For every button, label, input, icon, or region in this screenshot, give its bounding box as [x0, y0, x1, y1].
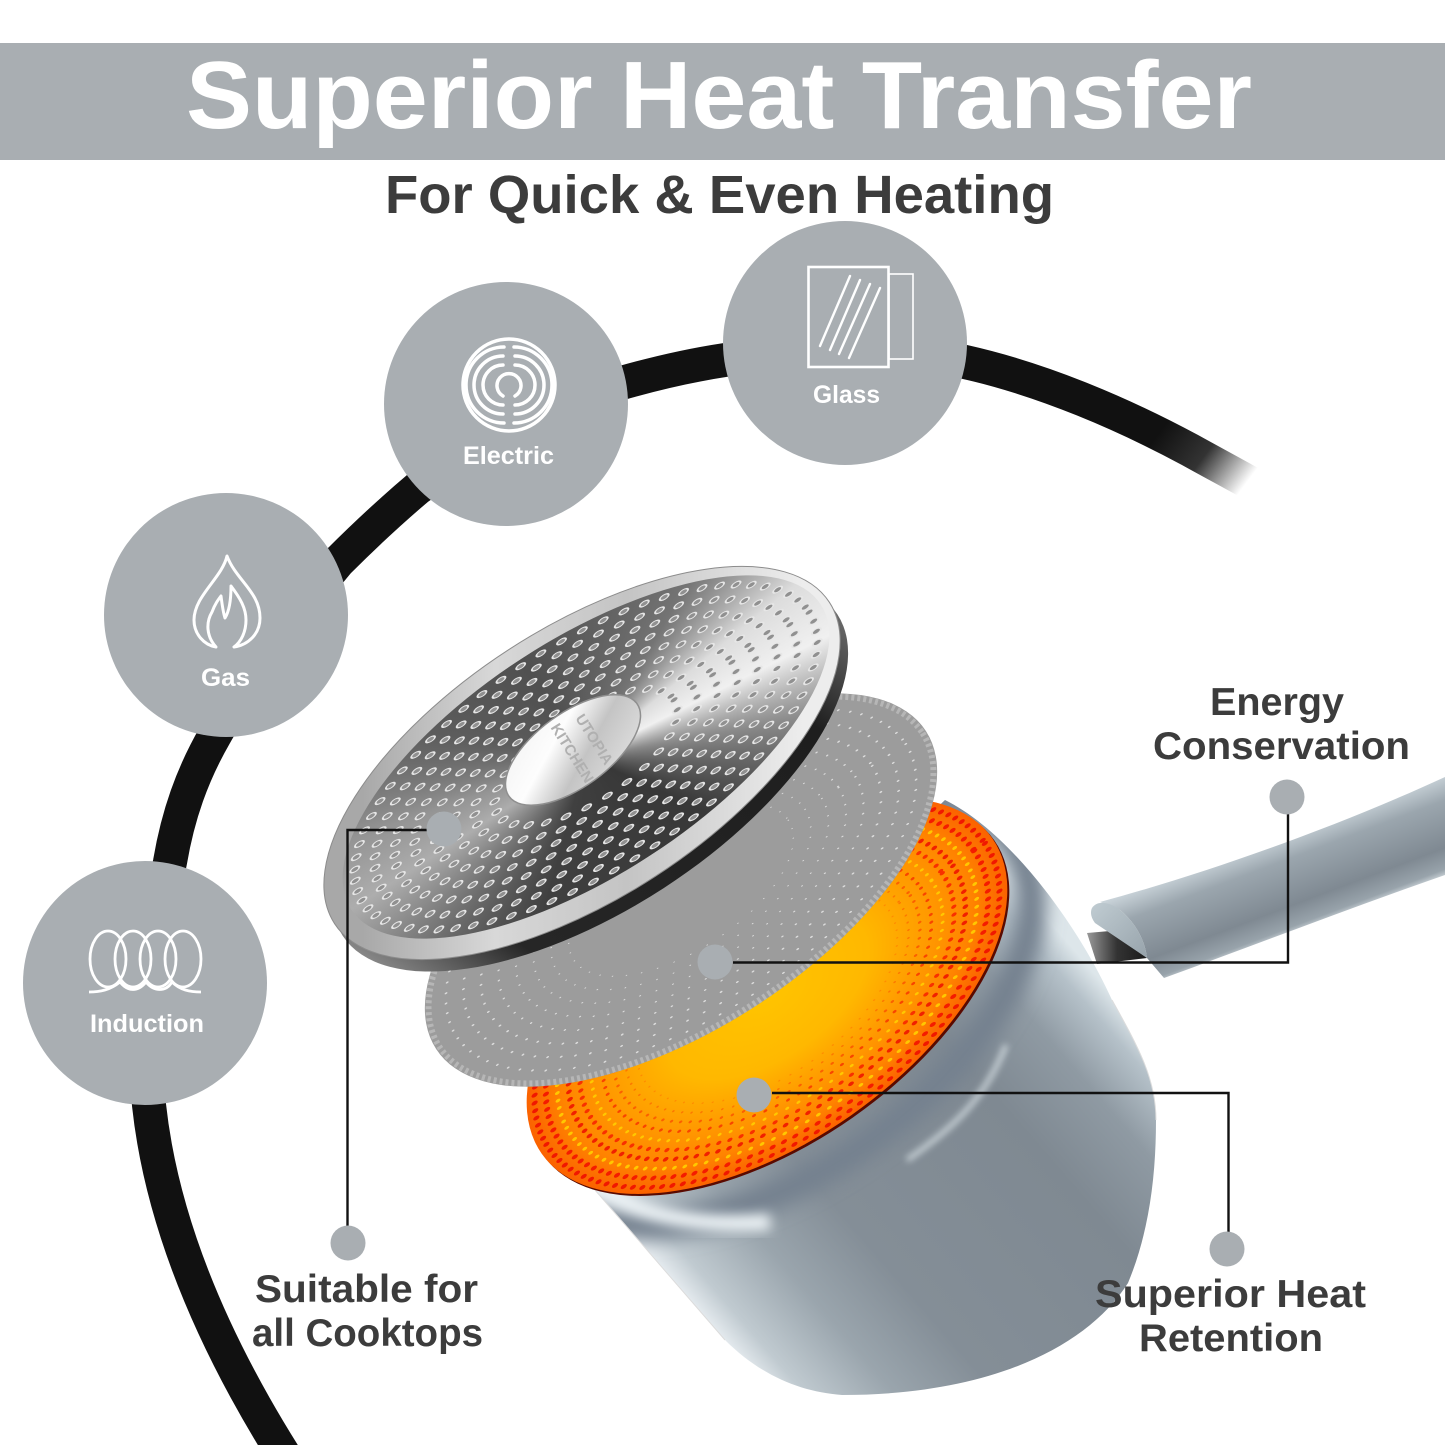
pan handle	[1087, 777, 1445, 978]
cooktop badge: induction	[23, 861, 267, 1105]
label: gas: Gas	[201, 664, 250, 692]
cooktop badge: electric	[384, 282, 628, 526]
title banner: Superior Heat Transfer	[186, 42, 1252, 149]
disc rim	[261, 489, 903, 1037]
callout: superior heat retention: Superior Heat	[1095, 1273, 1366, 1316]
disc textured face	[287, 506, 885, 1008]
disc centre hub with brand	[487, 674, 659, 826]
callout: energy conservation: Energy	[1210, 681, 1344, 724]
heated orange layer	[458, 719, 1078, 1275]
disc dark side band	[269, 501, 911, 1049]
handle end cap	[1091, 903, 1147, 958]
disc centre hub with brand: KITCHEN	[547, 721, 597, 786]
rim highlight right	[907, 1045, 1006, 1160]
callout: suitable for all cooktops: all Cooktops	[252, 1312, 483, 1355]
cooktop badge: gas	[104, 493, 348, 737]
thin pan outline	[569, 1000, 1156, 1340]
callout: suitable for all cooktops: Suitable for	[255, 1268, 478, 1311]
icon: glass panel	[808, 267, 913, 367]
callout: superior heat retention: Retention	[1139, 1317, 1323, 1360]
icon: electric coil	[463, 339, 555, 431]
callout: superior heat retention	[736, 1078, 1377, 1360]
callout: energy conservation	[698, 681, 1410, 980]
shadow around heated plate	[601, 800, 1058, 1252]
callout: energy conservation: Conservation	[1153, 725, 1410, 768]
subtitle: For Quick & Even Heating	[385, 165, 1054, 225]
callout: suitable for all cooktops	[252, 812, 489, 1355]
grey perforated middle layer	[361, 615, 1001, 1165]
title banner	[0, 42, 1445, 160]
cooktop badge: glass	[723, 221, 967, 465]
label: induction: Induction	[90, 1010, 204, 1038]
disc centre hub with brand: UTOPIA	[572, 711, 616, 768]
handle bracket	[1087, 931, 1147, 964]
rim highlight lower	[590, 1175, 770, 1223]
icon: induction coil	[89, 931, 201, 992]
icon: gas flame	[194, 556, 260, 647]
label: electric: Electric	[463, 442, 554, 470]
label: glass: Glass	[813, 381, 880, 409]
pan body	[594, 800, 1156, 1395]
metal induction base disc	[261, 489, 911, 1049]
black cooktop ring arc	[146, 351, 1320, 1445]
